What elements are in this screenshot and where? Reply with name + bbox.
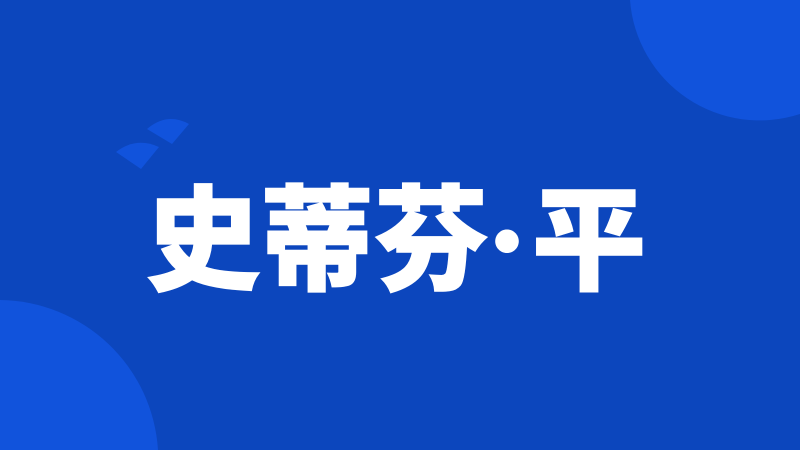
title: 平 [532, 149, 646, 314]
title: 芬 [374, 149, 488, 314]
title: 蒂 [260, 149, 374, 314]
circle: top right [630, 0, 800, 120]
circle: bottom left [0, 300, 158, 450]
title: · [465, 178, 549, 298]
icon: fan logo [116, 119, 189, 169]
title: 史 [146, 149, 260, 314]
